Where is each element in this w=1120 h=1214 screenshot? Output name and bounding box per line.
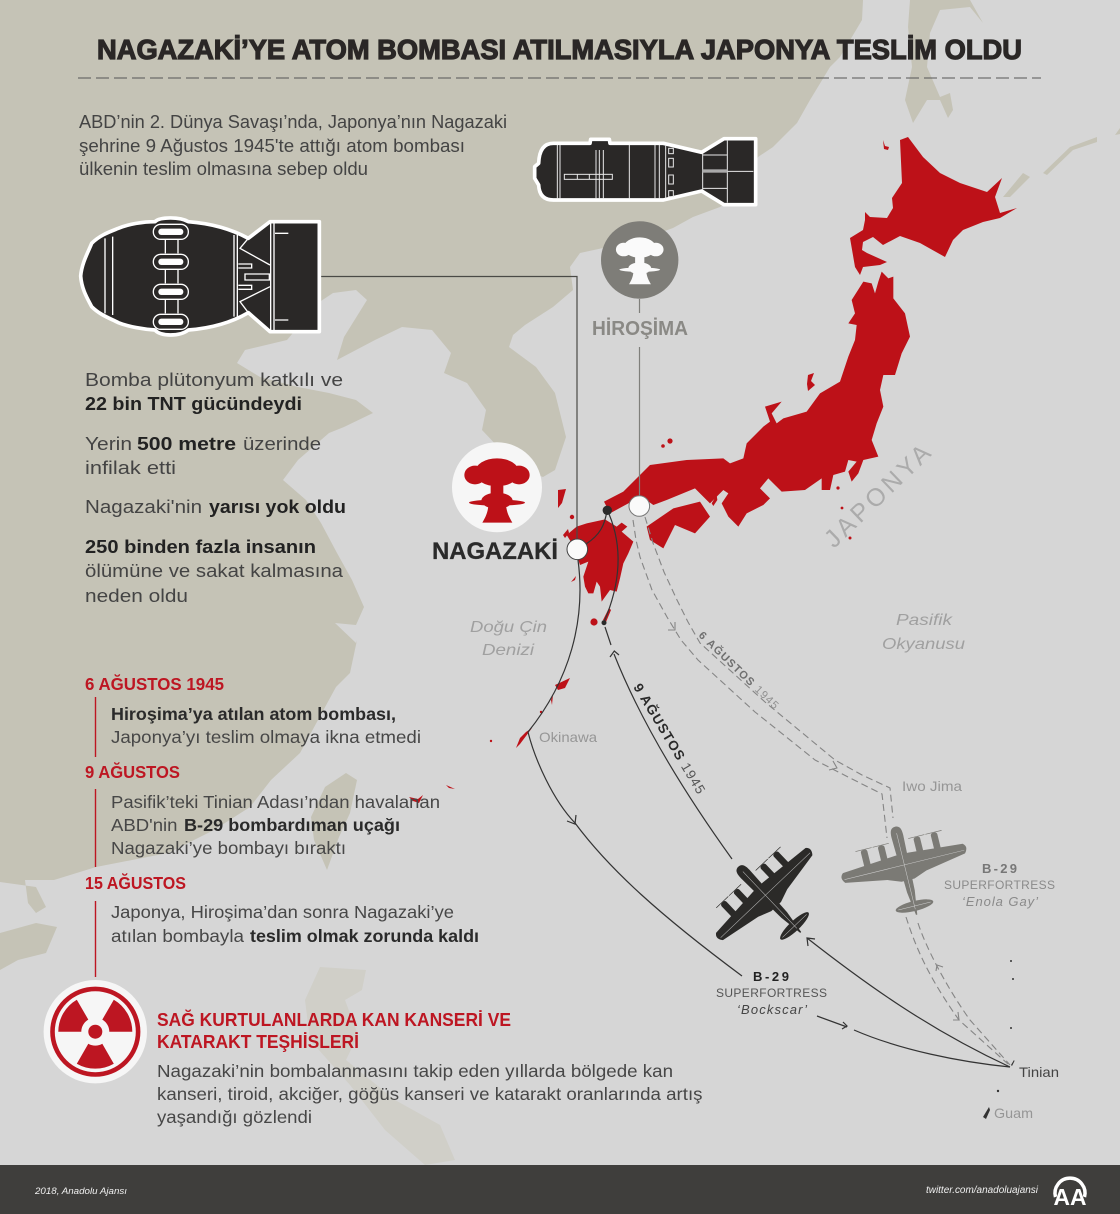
icon: Hiroşima cloud badge (601, 221, 678, 299)
date: 6 August: 6 AĞUSTOS 1945 (85, 673, 224, 694)
marker: Hiroşima (629, 496, 650, 516)
text: 15 August event: Japonya, Hiroşima’dan sonra Nagazaki’ye (111, 902, 454, 922)
text: 9 August event: Nagazaki’ye bombayı bıraktı (111, 838, 346, 858)
intro text: ülkenin teslim olmasına sebep oldu (79, 159, 368, 179)
footer (0, 1165, 1120, 1214)
intro text (79, 112, 507, 179)
small islands (409, 140, 889, 803)
timeline (85, 673, 479, 977)
bomb facts text: 250 binden fazla insanın (85, 537, 316, 557)
landmass: Hainan (0, 923, 57, 970)
label: Okinawa: Okinawa (539, 729, 597, 745)
map of Japan (409, 137, 1017, 803)
marker: Sata dot (602, 620, 606, 625)
heading: survivors: KATARAKT TEŞHİSLERİ (157, 1032, 359, 1052)
Shikoku (647, 495, 717, 548)
sea labels: Pasifik (896, 612, 953, 629)
logo: AA: AA (1054, 1184, 1086, 1210)
text: survivors: kanseri, tiroid, akciğer, göğüs kanseri ve katarakt oranlarında artış (157, 1084, 703, 1104)
flight routes under map (409, 137, 1017, 1067)
sea labels (470, 612, 965, 659)
date: 15 August: 15 AĞUSTOS (85, 872, 186, 893)
label: Tinian: Tinian (1019, 1064, 1059, 1080)
text: survivors (157, 1061, 703, 1127)
bomb facts text (85, 370, 346, 606)
heading: survivors (157, 1009, 511, 1052)
landmass: Sakhalin (905, 0, 983, 123)
title: NAGAZAKİ’YE ATOM BOMBASI ATILMASIYLA JAPONYA TESLİM OLDU (97, 34, 1022, 65)
marker: Kokura dark dot (603, 506, 612, 515)
label: Enola Gay: B-29 (982, 861, 1017, 876)
intro text: ABD’nin 2. Dünya Savaşı’nda, Japonya’nın Nagazaki (79, 112, 507, 132)
text: survivors: yaşandığı gözlendi (157, 1107, 312, 1127)
bomb facts text: Nagazaki'nin (85, 497, 202, 517)
label: Bockscar: SUPERFORTRESS (716, 986, 827, 1000)
Honshu (604, 272, 910, 527)
bomb facts text: 22 bin TNT gücündeydi (85, 394, 302, 414)
small islands near Tinian and Guam (983, 960, 1014, 1119)
bomb facts text: üzerinde (243, 434, 321, 454)
route: Enola Gay (633, 517, 1010, 1065)
icon: Little Boy bomb (535, 139, 756, 205)
label: Bockscar: B-29 (753, 969, 789, 984)
marker: Nagazaki (567, 539, 588, 560)
text: 15 August event (111, 902, 479, 946)
bomb facts text: 500 metre (137, 434, 236, 454)
footer credit: 2018, Anadolu Ajansı (34, 1186, 127, 1197)
icon: Nagazaki cloud badge (452, 442, 542, 532)
heading: survivors: SAĞ KURTULANLARDA KAN KANSERİ VE (157, 1009, 511, 1030)
bomb facts text: yarısı yok oldu (209, 497, 346, 517)
label: Iwo Jima: Iwo Jima (902, 778, 962, 794)
text: 15 August event: atılan bombayla (111, 926, 244, 946)
landmass: Taiwan (311, 773, 357, 870)
text: 6 August event: Japonya’yı teslim olmaya ikna etmedi (111, 727, 421, 747)
mushroom cloud white (616, 237, 664, 284)
date: 9 August: 9 AĞUSTOS (85, 761, 180, 782)
label: Enola Gay: ‘Enola Gay’ (962, 894, 1039, 909)
landmass: Asia mainland (0, 0, 863, 913)
mushroom cloud red (464, 458, 530, 523)
bomb facts text: ölümüne ve sakat kalmasına (85, 561, 344, 581)
date label: 6 Ağustos route: 6 AĞUSTOS 1945 (696, 629, 781, 712)
route: Bockscar (528, 510, 1010, 1067)
landmass: Philippines (305, 967, 455, 1165)
icon: Fat Man bomb (81, 218, 319, 335)
leader line: Hiroşima (638, 299, 640, 497)
sea labels: Doğu Çin (470, 619, 547, 636)
text: 6 August event: Hiroşima’ya atılan atom bombası, (111, 704, 396, 724)
label: Enola Gay: SUPERFORTRESS (944, 878, 1055, 892)
text: 9 August event: Pasifik’teki Tinian Adası’ndan havalanan (111, 792, 440, 812)
bomb facts text: Bomba plütonyum katkılı ve (85, 370, 343, 390)
icon: B-29 Bockscar plane (692, 823, 847, 977)
text: survivors: Nagazaki’nin bombalanmasını takip eden yıllarda bölgede kan (157, 1061, 673, 1081)
label: Hiroşima: HİROŞİMA (592, 317, 688, 340)
text: 9 August event: B-29 bombardıman uçağı (184, 815, 400, 835)
bomb facts text: neden oldu (85, 586, 188, 606)
leader line: Nagazaki (319, 276, 577, 540)
Hokkaido (850, 137, 1017, 275)
icon: B-29 Enola Gay plane (833, 811, 979, 930)
sea labels: Okyanusu (882, 636, 965, 653)
landmass: Kuril islands (1003, 128, 1120, 197)
sea labels: Denizi (482, 642, 535, 659)
label: Bockscar: ‘Bockscar’ (737, 1002, 808, 1017)
footer twitter: twitter.com/anadoluajansi (926, 1185, 1039, 1196)
label: Bockscar (716, 969, 827, 1017)
intro text: şehrine 9 Ağustos 1945'te attığı atom bombası (79, 136, 465, 156)
label: Guam: Guam (994, 1105, 1033, 1121)
date label: 9 Ağustos route: 9 AĞUSTOS 1945 (630, 681, 708, 797)
bomb facts text: infilak etti (85, 458, 176, 478)
text: 6 August event (111, 704, 421, 747)
text: 9 August event: ABD'nin (111, 815, 178, 835)
icon: radiation (44, 980, 147, 1083)
text: 9 August event (111, 792, 440, 858)
label: Enola Gay (944, 861, 1055, 909)
label: Japonya: JAPONYA (819, 439, 937, 553)
bomb facts text: Yerin (85, 434, 132, 454)
label: Nagazaki: NAGAZAKİ (432, 538, 558, 565)
text: 15 August event: teslim olmak zorunda kaldı (250, 926, 479, 946)
Kyushu (567, 519, 633, 602)
